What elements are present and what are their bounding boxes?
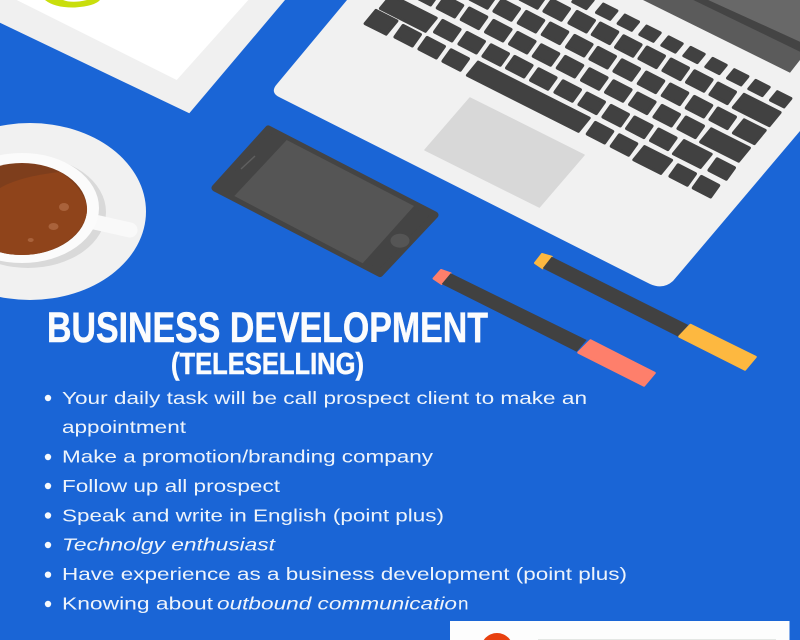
bullet: daily task: appointment bbox=[62, 417, 186, 437]
logo card bbox=[450, 621, 790, 640]
icon: notebook paper bbox=[0, 0, 285, 113]
bullet list bbox=[45, 388, 627, 613]
bullet: daily task bbox=[45, 388, 587, 437]
bullet: daily task: Your daily task will be call prospect client to make an bbox=[62, 388, 587, 408]
bullet: outbound: Knowing about bbox=[62, 593, 213, 613]
laptop base bbox=[274, 0, 800, 286]
keyboard bbox=[365, 0, 791, 197]
subtitle: (TELESELLING) bbox=[171, 346, 364, 381]
trackpad bbox=[425, 98, 584, 207]
icon: coffee cup on saucer bbox=[0, 123, 146, 300]
bullet: outbound: outbound communicatio bbox=[217, 593, 457, 613]
title: BUSINESS DEVELOPMENT bbox=[47, 304, 488, 352]
icon: yellow pen bbox=[535, 254, 756, 370]
bullet: technology: Technolgy enthusiast bbox=[62, 535, 276, 555]
bullet: experience: Have experience as a business development (point plus) bbox=[62, 564, 627, 584]
bullet: outbound: n bbox=[458, 593, 468, 613]
laptop bbox=[274, 0, 800, 286]
bullet: follow up: Follow up all prospect bbox=[62, 476, 280, 496]
icon: coral pen bbox=[434, 270, 654, 386]
bullet: outbound bbox=[45, 593, 469, 613]
bullet: English: Speak and write in English (point plus) bbox=[62, 505, 444, 525]
bullet: promotion: Make a promotion/branding company bbox=[62, 447, 433, 467]
laptop screen bbox=[643, 0, 800, 73]
icon: smartphone bbox=[215, 129, 435, 274]
